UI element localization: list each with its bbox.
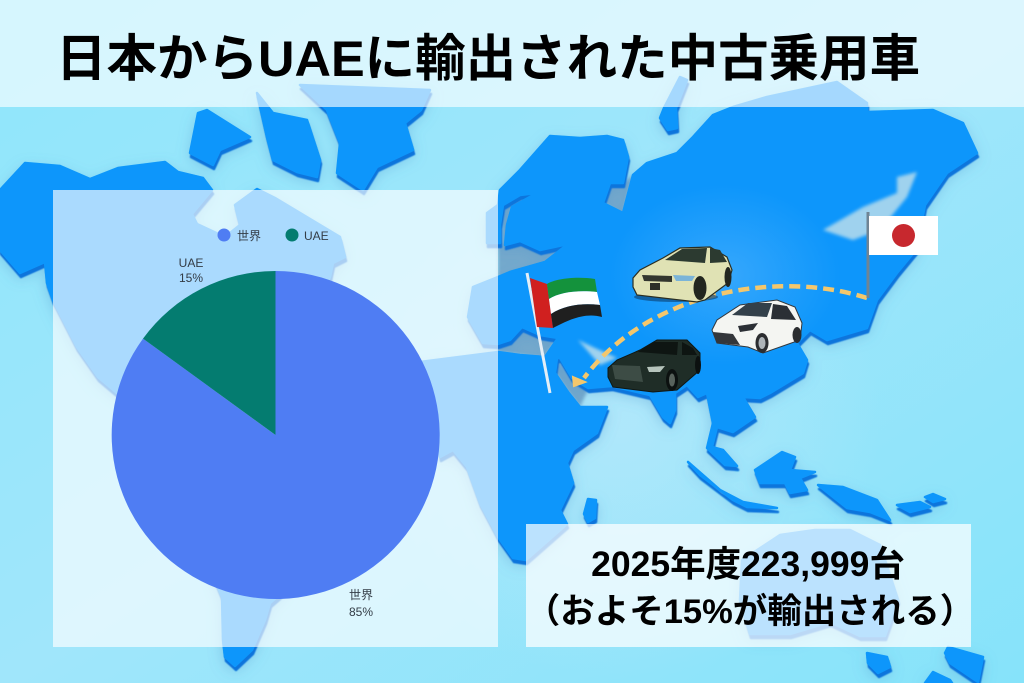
map: Arctic island east [257,93,320,177]
header band [0,0,1024,107]
map: Eurasia and Africa [420,82,977,560]
map: North America [0,162,345,420]
pie label: UAE: UAE [179,256,203,270]
map: Arctic island west [190,110,250,165]
map: Australia [740,530,898,636]
chart legend [218,228,329,243]
flag: UAE [527,273,602,393]
chart legend: UAE [304,229,329,243]
pie label: world: 世界 [349,588,373,602]
pie label: world: 85% [349,605,373,619]
callout line 2: （およそ15%が輸出される） [526,592,974,631]
car: cream sedan [633,247,732,302]
car: black sedan [608,340,701,392]
arrow: route from Japan to UAE [573,286,867,386]
chart legend: 世界 [237,229,261,243]
pie label: UAE [179,256,203,285]
map: inland seas [578,172,917,365]
map: northern islet [660,77,687,130]
map: Greenland [300,85,430,190]
callout line 1: 2025年度223,999台 [591,544,905,584]
map: inland sea shading [498,175,633,407]
flag: Japan [868,212,938,298]
map: New Guinea [818,485,890,520]
map: southern islands [867,647,983,683]
map: lit area of Asia [610,185,840,365]
map: South America [172,420,300,666]
map: Borneo and Sulawesi [755,452,815,493]
map: Sumatra and Java [688,462,777,508]
panel: pie chart [53,190,498,647]
pie slices [112,271,440,599]
pie label: UAE: 15% [179,271,203,285]
map: small islands [897,494,945,512]
car: white hatchback [712,300,802,353]
callout: export volume [526,524,974,647]
pie label: world [349,588,373,619]
title: 日本からUAEに輸出された中古乗用車 [56,30,920,87]
map: Madagascar [584,499,596,522]
